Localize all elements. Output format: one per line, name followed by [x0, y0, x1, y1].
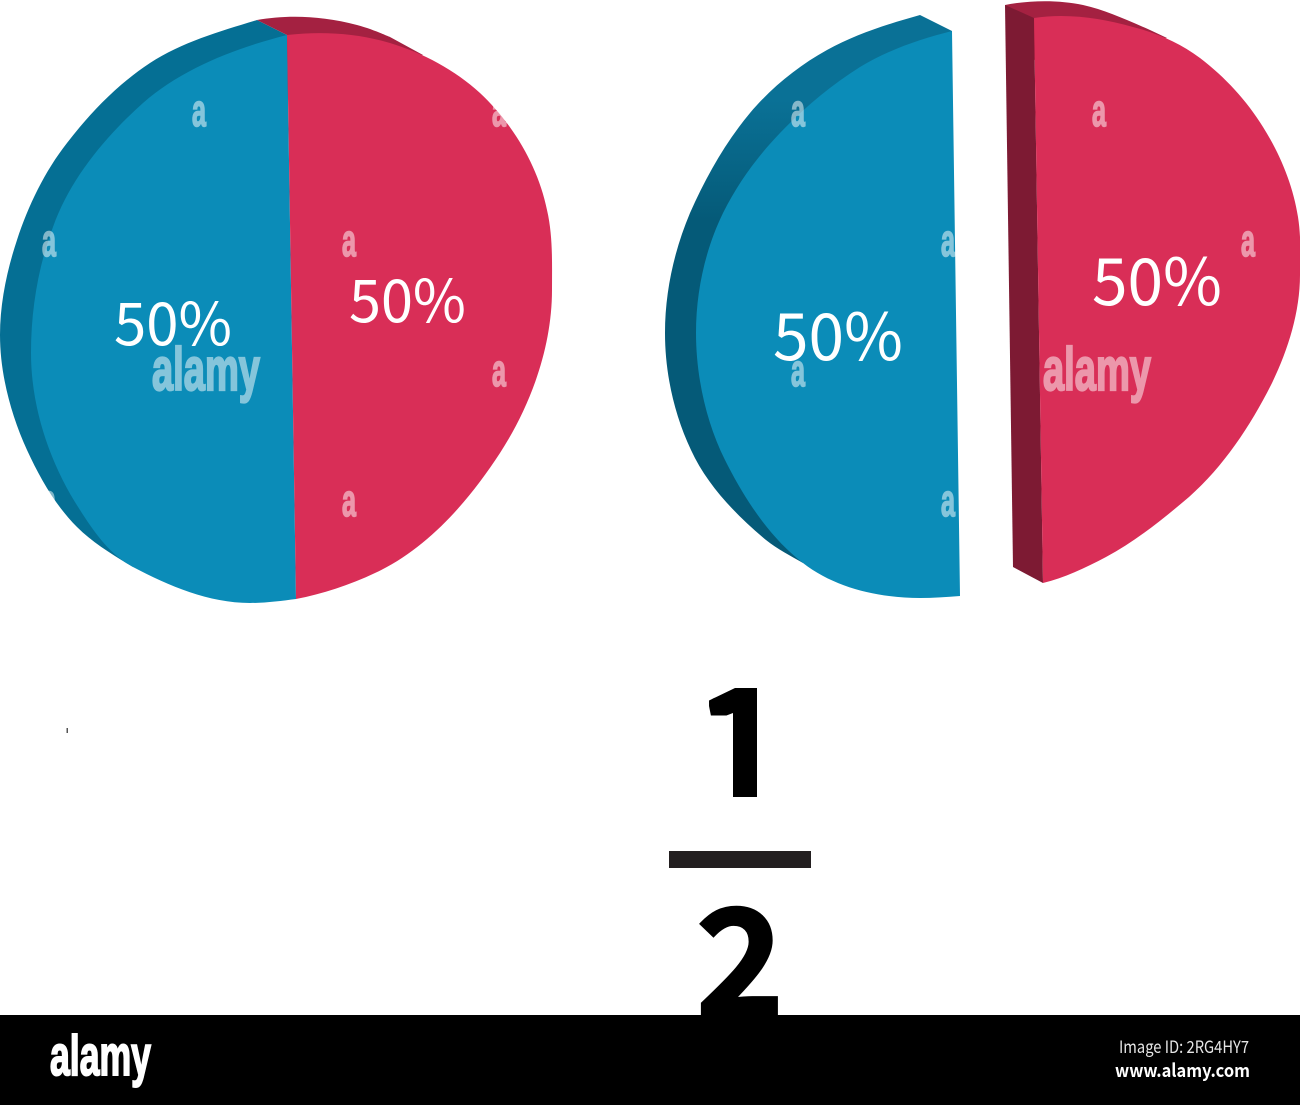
watermark pattern: a — [42, 475, 57, 526]
pie side: red depth — [257, 17, 423, 100]
label: red 50%: 50% — [1092, 230, 1222, 324]
watermark pattern: a — [791, 85, 806, 136]
watermark pattern: a — [342, 475, 357, 526]
watermark pattern: a — [192, 85, 207, 136]
blue half face — [696, 31, 960, 598]
watermark pattern: a — [1241, 215, 1256, 266]
pie side: blue depth — [0, 20, 287, 567]
fraction: one half — [669, 688, 811, 1015]
red half face — [1034, 16, 1300, 583]
fraction bar — [669, 851, 811, 868]
label: blue 50%: 50% — [114, 277, 232, 362]
pie face: blue half — [31, 35, 296, 603]
numerator: 1 — [696, 624, 788, 841]
image id: Image ID: 2RG4HY7 — [1119, 1033, 1249, 1058]
website: www.alamy.com — [1115, 1057, 1250, 1083]
watermark pattern: a — [492, 345, 507, 396]
watermark pattern: a — [342, 215, 357, 266]
watermark pattern — [42, 85, 1256, 526]
watermark pattern: a — [941, 475, 956, 526]
watermark: alamy on red: alamy — [1043, 336, 1151, 403]
red half cut side — [1005, 5, 1043, 583]
watermark pattern: a — [492, 85, 507, 136]
watermark pattern: a — [941, 215, 956, 266]
watermark pattern: a — [42, 215, 57, 266]
red half top side — [1005, 1, 1167, 60]
blue half side — [665, 15, 952, 563]
denominator: 2 — [696, 844, 784, 1059]
watermark pattern: a — [791, 345, 806, 396]
stray mark — [66, 728, 68, 733]
footer bar — [0, 1015, 1300, 1105]
watermark pattern: a — [1092, 85, 1107, 136]
footer logo: alamy — [50, 1024, 151, 1088]
chart: joined pie — [0, 17, 552, 603]
watermark: alamy on blue: alamy — [152, 336, 260, 403]
label: red 50%: 50% — [349, 254, 466, 339]
pie face: red half — [287, 33, 552, 599]
label: blue 50%: 50% — [773, 285, 903, 379]
chart: separated pie — [665, 1, 1300, 598]
